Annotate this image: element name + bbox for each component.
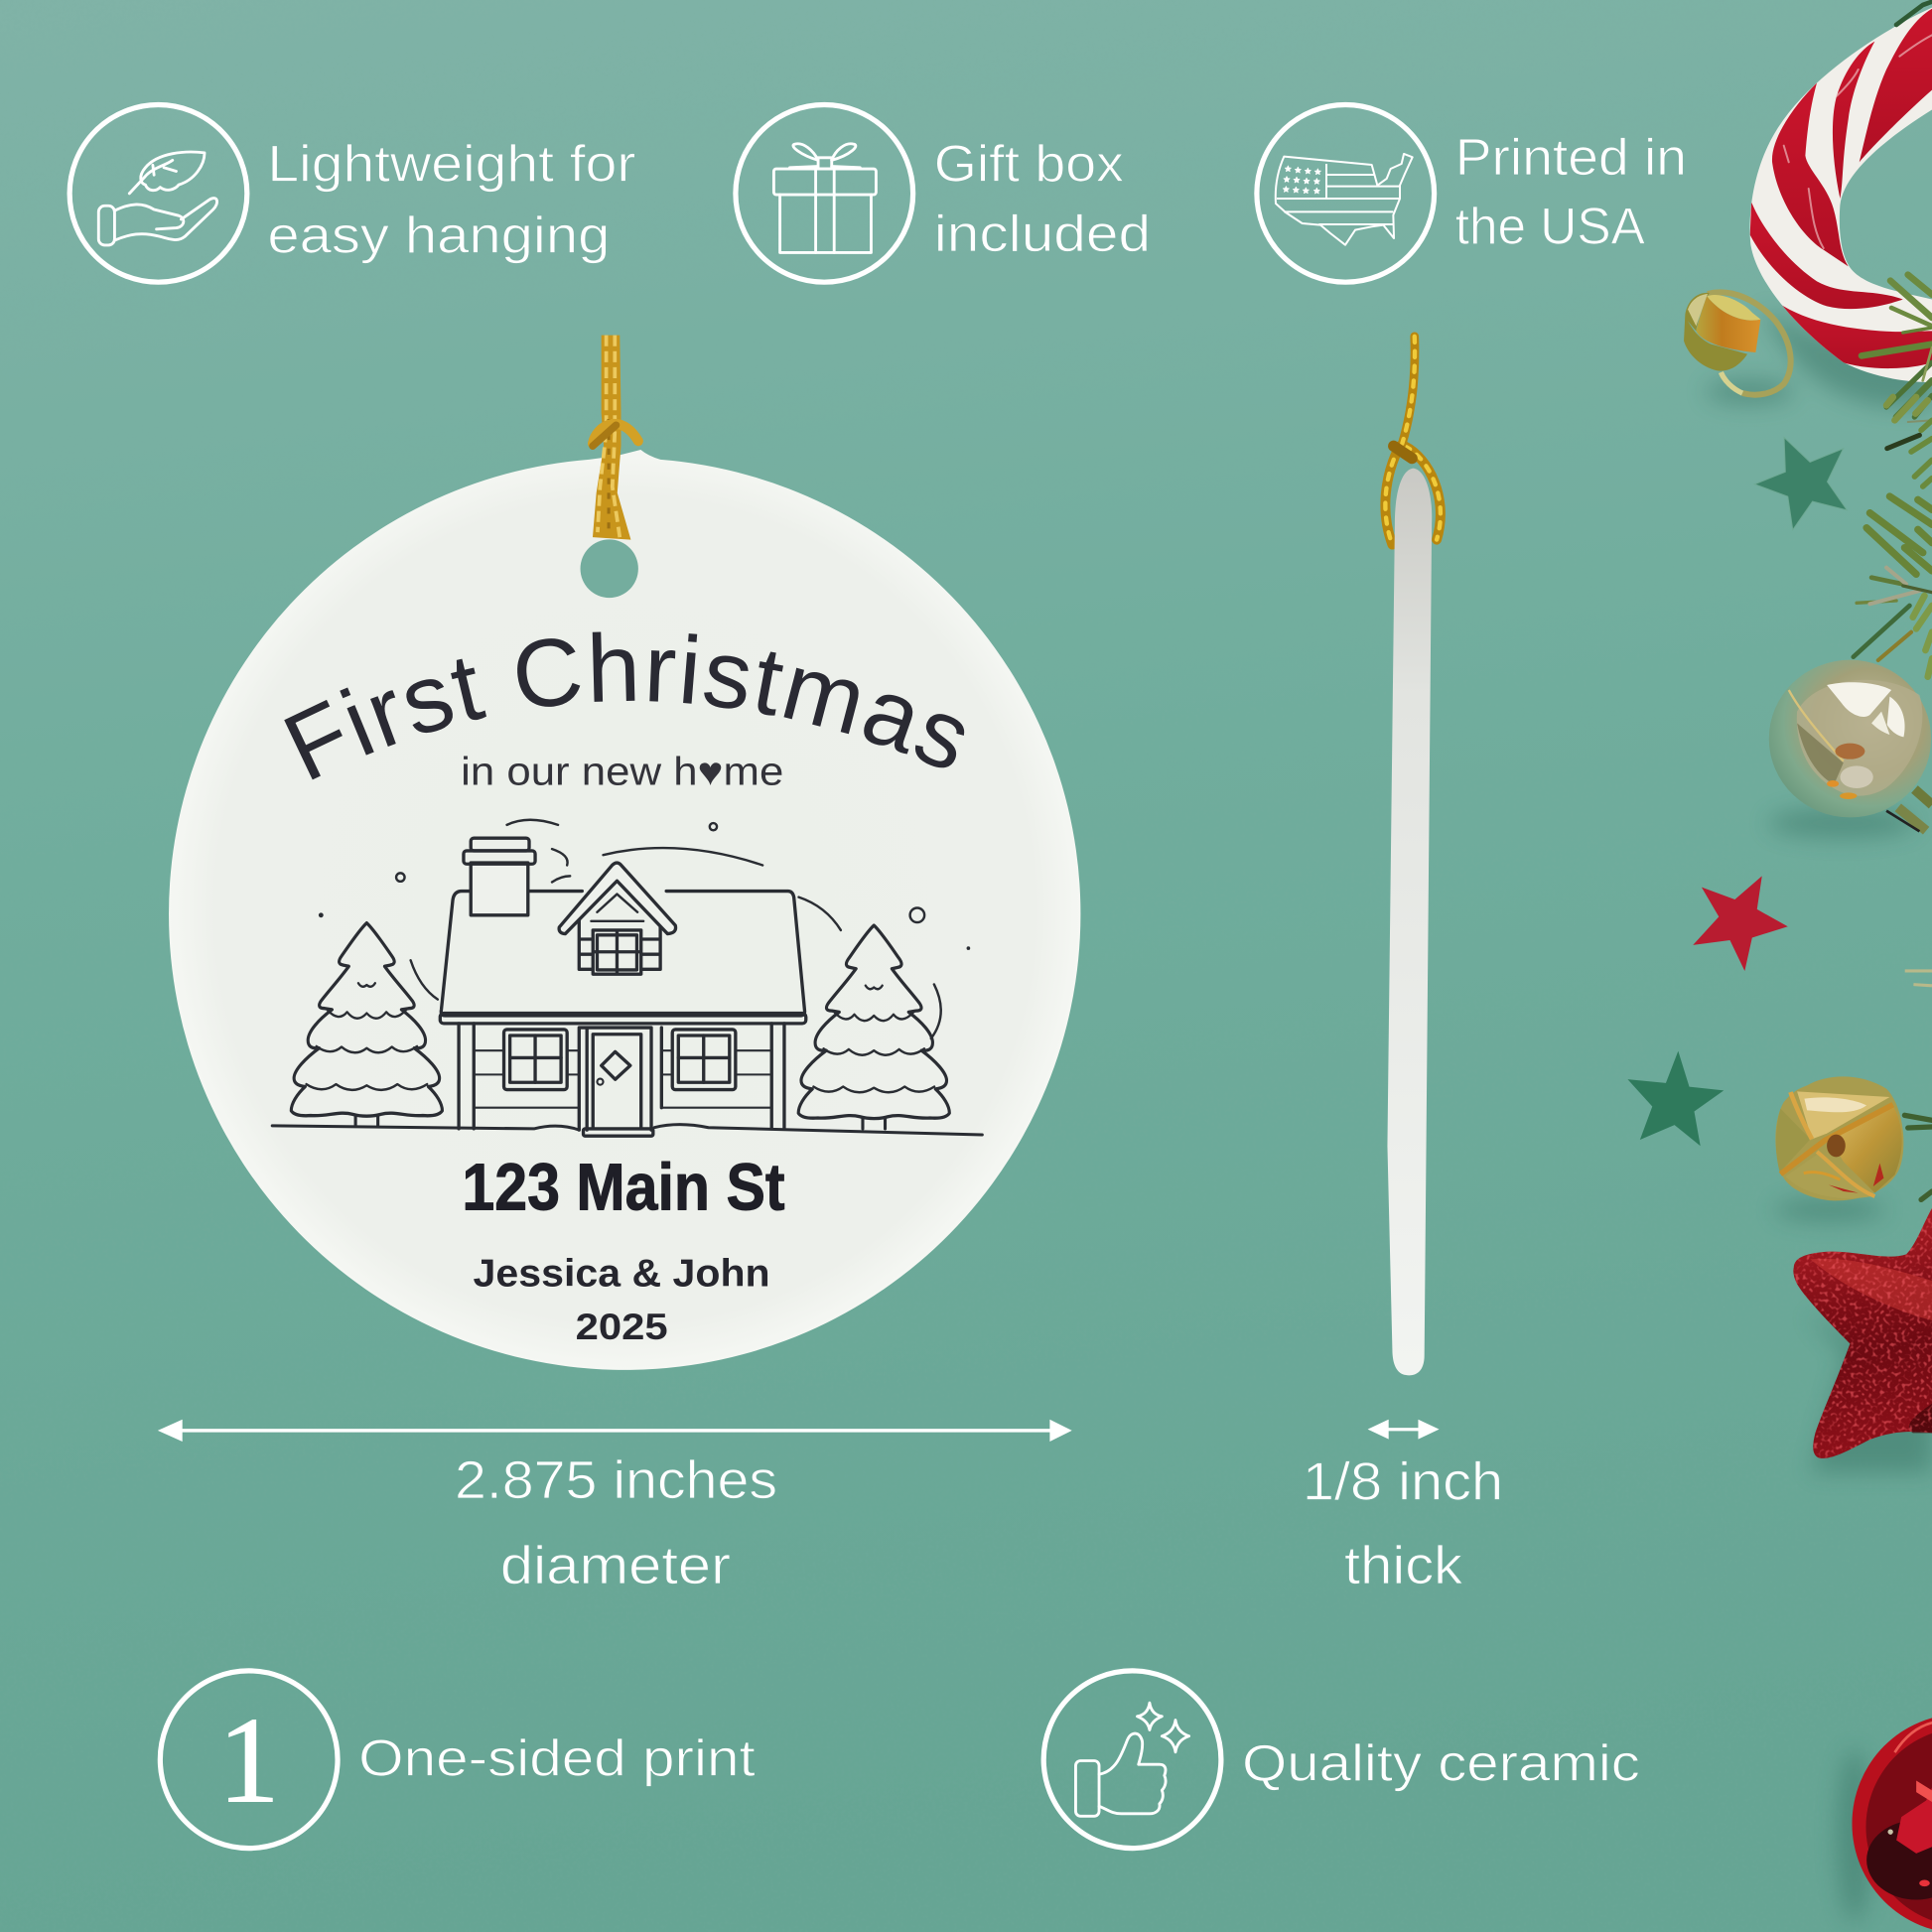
label: Lightweight for [267, 135, 635, 193]
thickness arrow [1368, 1420, 1440, 1440]
gold ribbon [1684, 292, 1791, 395]
thickness label: thick [1344, 1537, 1462, 1595]
ornament subtitle: in our new h♥me [461, 751, 783, 794]
thickness label [1303, 1452, 1503, 1595]
ornament names: Jessica & John [474, 1253, 770, 1296]
icon: leaf over hand [69, 104, 247, 282]
diameter arrow [158, 1420, 1072, 1442]
ornament front: gold string [593, 336, 638, 540]
label: the USA [1455, 199, 1645, 256]
ornament side view: ceramic edge [1387, 469, 1432, 1375]
ornament year: 2025 [576, 1306, 668, 1347]
diameter label: 2.875 inches [455, 1451, 777, 1510]
decoration: pine branch and silver bauble [1769, 397, 1932, 831]
red glitter star [1793, 1208, 1932, 1458]
decoration: pale pine tips [1905, 971, 1932, 986]
decoration: green star bottom [1627, 1051, 1724, 1146]
icon: number one: 1 [218, 1691, 280, 1828]
label [267, 135, 635, 264]
ornament front: ceramic disc [169, 450, 1080, 1370]
decoration: green star top [1754, 438, 1847, 530]
label: Gift box [934, 135, 1124, 193]
ornament side view: string loop behind edge [1385, 446, 1441, 545]
label [934, 135, 1151, 263]
ornament title: First Christmas: First Christmas [284, 631, 965, 780]
icon: number one [160, 1671, 338, 1849]
label: Quality ceramic [1242, 1734, 1640, 1792]
label: easy hanging [267, 207, 610, 264]
ornament address: 123 Main St [462, 1151, 785, 1225]
label: One-sided print [358, 1729, 756, 1787]
decoration: jingle bell and glitter star [1775, 1076, 1932, 1458]
icon: gift box [736, 104, 913, 282]
ornament side view: string top and knot [1394, 337, 1415, 459]
pine needles near cane [1862, 2, 1932, 417]
icon: thumbs up with sparkles [1043, 1671, 1221, 1849]
diameter label [455, 1451, 777, 1595]
house illustration [272, 820, 982, 1136]
feature: printed in USA [1257, 104, 1687, 282]
jingle bell [1775, 1076, 1903, 1200]
decoration: soft shadows [1706, 308, 1932, 1922]
feature: lightweight [69, 104, 635, 282]
silver bauble [1769, 660, 1932, 831]
icon: USA flag map [1257, 104, 1435, 282]
label: Printed in [1455, 129, 1687, 187]
candy cane [1750, 7, 1932, 382]
feature: one-sided print [160, 1671, 756, 1849]
decoration: candy cane and gold ribbon [1684, 2, 1932, 417]
feature: quality ceramic [1043, 1671, 1640, 1849]
label: included [934, 206, 1151, 263]
feature: gift box [736, 104, 1151, 282]
ornament front: printed artwork [270, 631, 984, 1347]
pine branch [1854, 397, 1932, 677]
needles by bell [1904, 1115, 1932, 1199]
label [1455, 129, 1687, 256]
thickness label: 1/8 inch [1303, 1452, 1503, 1511]
decoration: red star top [1693, 876, 1788, 971]
decoration: red bauble [1852, 1714, 1932, 1932]
diameter label: diameter [500, 1537, 731, 1595]
